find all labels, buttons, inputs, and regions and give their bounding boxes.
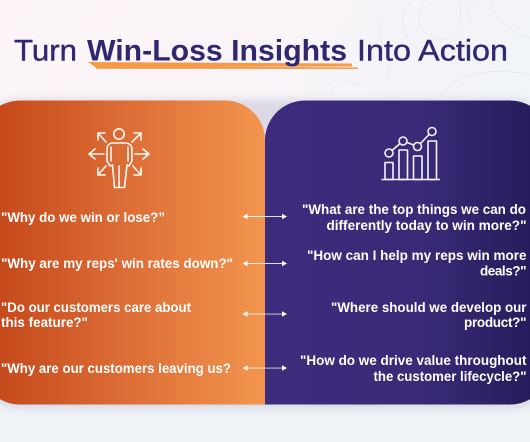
right question 4: "How do we drive value throughout	[300, 353, 527, 368]
right questions	[300, 202, 527, 384]
title text: Into Action: Into Action	[357, 34, 508, 68]
left question 3: this feature?"	[1, 315, 88, 330]
left question 2: "Why are my reps' win rates down?"	[1, 256, 233, 271]
arrow row 3	[242, 311, 287, 317]
left question 3	[1, 300, 191, 330]
right question 2	[307, 248, 527, 278]
panel: left orange	[0, 100, 265, 404]
right question 3: product?"	[464, 315, 526, 330]
left questions	[1, 210, 233, 376]
title underline brush stroke	[88, 62, 358, 69]
right question 3: "Where should we develop our	[331, 300, 527, 315]
right question 1	[302, 202, 526, 233]
right question 1: "What are the top things we can do	[302, 202, 526, 217]
icon: person with arrows	[89, 129, 149, 188]
title	[14, 34, 508, 69]
panel: right purple	[265, 100, 530, 404]
right question 1: differently today to win more?"	[326, 218, 526, 233]
right question 2: "How can I help my reps win more	[307, 248, 527, 263]
panel shadow	[0, 99, 530, 408]
arrow row 1	[242, 214, 287, 219]
title text: Win-Loss Insights: Win-Loss Insights	[87, 34, 347, 68]
left question 4: "Why are our customers leaving us?	[1, 361, 231, 376]
icon: bar chart with trend line	[382, 128, 440, 180]
double arrows	[242, 214, 287, 371]
right question 3	[331, 300, 527, 330]
arrow row 4	[242, 365, 287, 371]
right question 4: the customer lifecycle?"	[374, 369, 526, 384]
left question 3: "Do our customers care about	[1, 300, 191, 315]
arrow row 2	[242, 261, 287, 266]
left question 1: "Why do we win or lose?”	[1, 210, 165, 225]
right question 4	[300, 353, 527, 384]
title text: Turn: Turn	[14, 34, 77, 68]
right question 2: deals?"	[480, 264, 526, 278]
